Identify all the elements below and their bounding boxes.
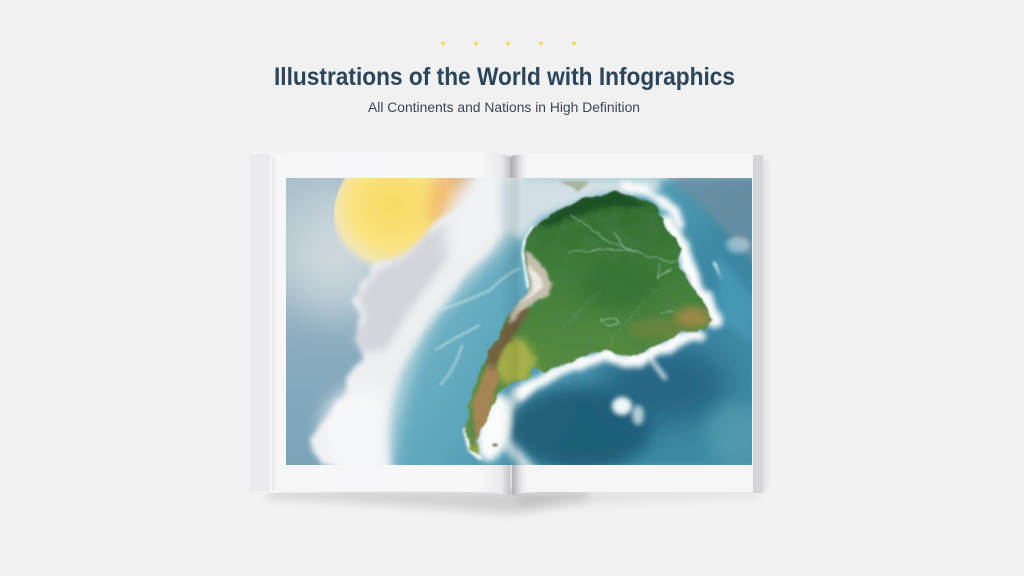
Patagonia brown bbox=[472, 362, 500, 440]
Amazon river system bbox=[560, 215, 680, 345]
sky bbox=[286, 178, 512, 465]
Andes snowy ridge bbox=[508, 250, 553, 325]
northern dark forest bbox=[535, 190, 650, 226]
eastern arid highlands bbox=[675, 307, 711, 329]
southern yellow-green plain bbox=[495, 338, 535, 386]
book drop shadow bbox=[268, 160, 768, 514]
ocean cloud patches bbox=[612, 237, 750, 425]
ocean upper right tone bbox=[666, 178, 752, 265]
Central America land bbox=[558, 181, 590, 192]
back cover right edge bbox=[753, 155, 763, 493]
infographic canvas bbox=[268, 42, 768, 516]
Andes dark slope bbox=[484, 305, 530, 370]
title: Illustrations of the World with Infographics bbox=[274, 63, 735, 91]
left page bbox=[250, 152, 510, 496]
sun bbox=[334, 178, 476, 266]
upper bright cloud bbox=[434, 178, 480, 254]
left spine strip bbox=[250, 154, 275, 492]
land terrain texture bbox=[474, 213, 680, 444]
decorative dots row bbox=[441, 42, 576, 46]
lower bright cloud bbox=[312, 382, 380, 465]
open book bbox=[250, 149, 768, 514]
limb haze bbox=[386, 228, 524, 465]
spine fold shadow bbox=[500, 155, 522, 495]
ocean deep south bbox=[509, 258, 752, 465]
upper pale ocean haze bbox=[500, 178, 660, 240]
small island bbox=[492, 443, 498, 447]
subtitle: All Continents and Nations in High Definition bbox=[368, 100, 640, 115]
Patagonia coastal white bbox=[471, 391, 517, 465]
South America landmass bbox=[460, 190, 720, 460]
right page bbox=[510, 153, 753, 496]
sky haze bbox=[285, 195, 385, 315]
ocean globe bbox=[389, 178, 760, 470]
thin ocean cloud streaks bbox=[435, 268, 520, 385]
grey cloud shading bbox=[352, 225, 450, 353]
central tone bbox=[580, 260, 660, 310]
illustration: earth and South America bbox=[286, 178, 752, 465]
coastal white surf bbox=[465, 187, 716, 470]
white cloud body bbox=[313, 170, 530, 470]
